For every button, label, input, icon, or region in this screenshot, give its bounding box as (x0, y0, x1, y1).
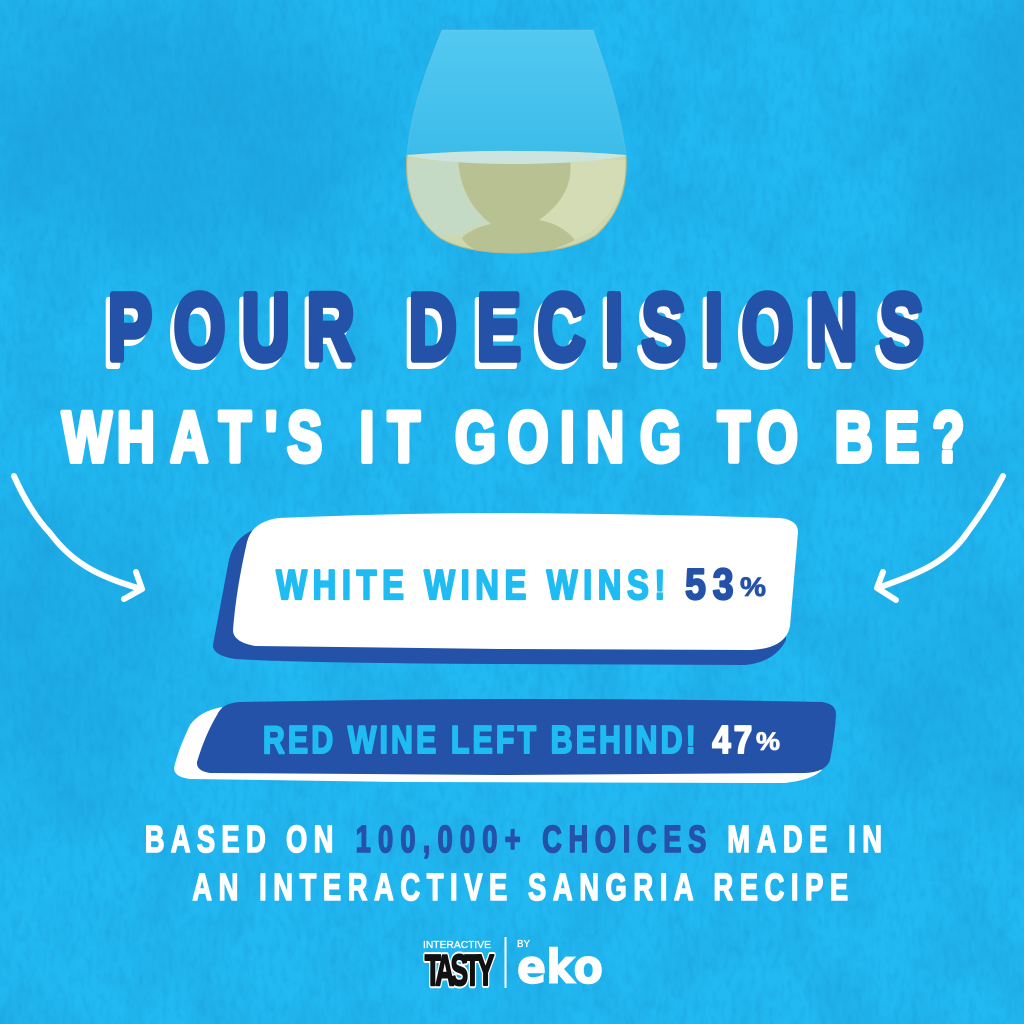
logo: Interactive Tasty by eko: TASTY (425, 945, 494, 995)
logo: Interactive Tasty by eko (423, 937, 603, 995)
text block: based on choices: BASED ON (145, 819, 333, 861)
text block: based on choices: 100,000+ (356, 819, 521, 861)
red wine label: RED WINE LEFT BEHIND! (263, 718, 696, 762)
white wine percentage (685, 559, 766, 609)
logo: Interactive Tasty by eko: BY (517, 939, 530, 950)
arrow: right pointing to white wine card (877, 476, 1003, 600)
logo: Interactive Tasty by eko: eko (517, 940, 603, 994)
white wine percentage: % (740, 572, 766, 602)
red wine percentage (712, 717, 780, 762)
white wine label: WHITE WINE WINS! (276, 561, 665, 608)
icon: stemless wine glass (404, 30, 628, 255)
text block: based on choices: AN INTERACTIVE SANGRIA RECIPE (192, 867, 848, 909)
text block: based on choices: CHOICES (542, 819, 706, 861)
white wine percentage: 53 (685, 559, 734, 609)
red wine percentage: 47 (712, 717, 752, 762)
text block: based on choices (145, 819, 882, 909)
logo: Interactive Tasty by eko: TASTY (425, 945, 494, 995)
panel: red wine result card (174, 699, 836, 783)
logo: Interactive Tasty by eko: INTERACTIVE (423, 939, 491, 951)
subtitle: what's it going to be: WHAT'S IT GOING TO BE? (62, 398, 964, 477)
panel: white wine result card (213, 513, 798, 665)
arrow: left pointing to white wine card (14, 476, 142, 599)
title: POUR DECISIONS: POUR DECISIONS (108, 275, 924, 380)
red wine percentage: % (756, 728, 780, 756)
title: POUR DECISIONS: POUR DECISIONS (104, 281, 920, 386)
text block: based on choices: MADE IN (727, 819, 882, 861)
